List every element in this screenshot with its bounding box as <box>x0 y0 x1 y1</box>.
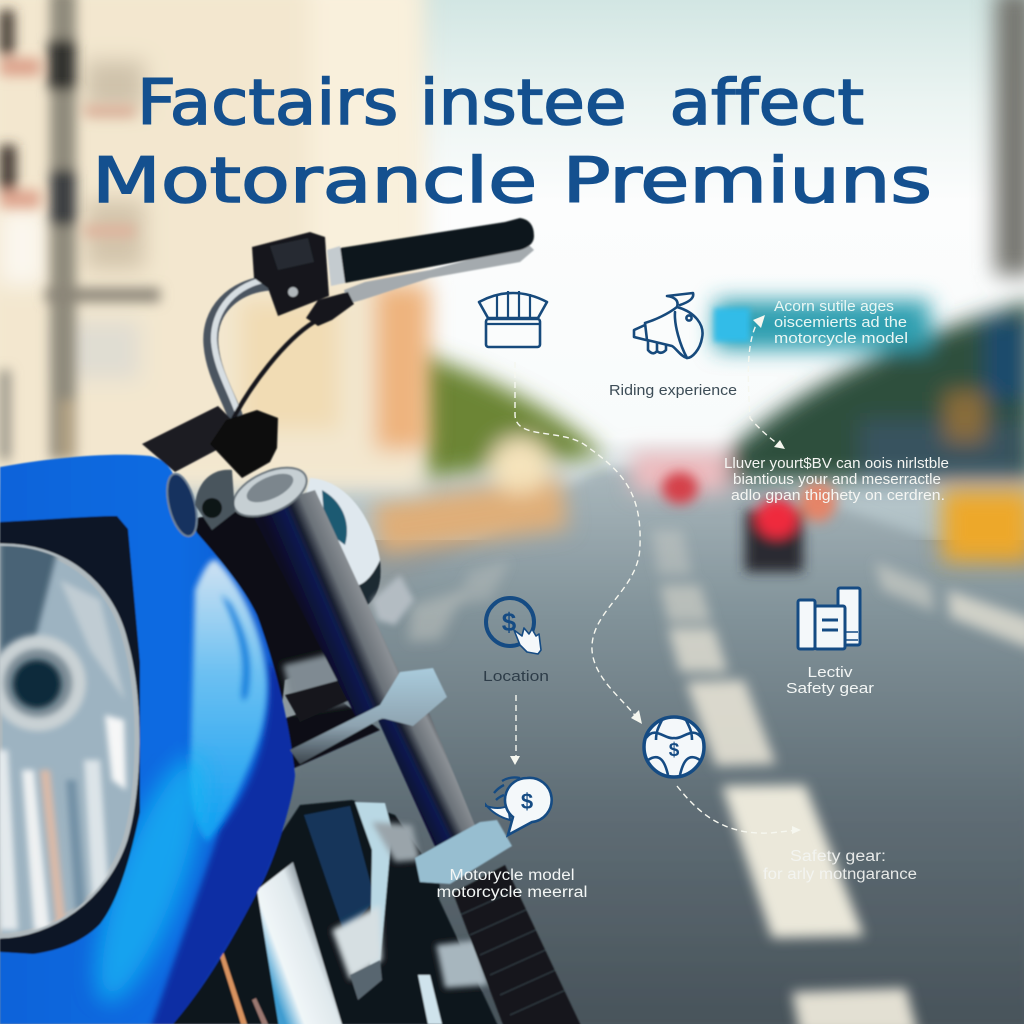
switch housing <box>252 232 329 316</box>
brake lever <box>344 244 534 304</box>
text block: motorcycle model <box>436 867 588 901</box>
text block: upper right: motorcycle model <box>774 330 908 347</box>
icon: coin with pointing hand <box>486 598 541 654</box>
icon: globe with dollar <box>644 717 704 777</box>
fairing mount bolt <box>162 471 202 539</box>
dashed connector arrows <box>515 318 798 833</box>
grip collar <box>327 246 345 286</box>
background: blurred trees and right side scenery <box>372 0 1024 562</box>
dark mechanical area behind fairing <box>170 500 500 1024</box>
text block: safety gear note: Safety gear: <box>790 848 886 865</box>
front fork upper tube <box>250 490 405 725</box>
icon: coin with pointing hand: $ <box>502 607 517 637</box>
background: blurred vehicles ahead <box>662 472 836 572</box>
chrome handlebar <box>211 279 270 415</box>
text block: middle right <box>724 455 949 504</box>
title <box>92 66 932 217</box>
fairing shading <box>74 560 300 1024</box>
background: road lane markings <box>408 530 1024 1024</box>
lower black clamp <box>142 406 278 478</box>
text block: lectiv safety gear <box>786 664 874 697</box>
text block: lectiv safety gear: Safety gear <box>786 680 874 697</box>
background: buildings on the left <box>0 0 430 490</box>
black cable <box>230 322 314 425</box>
front fairing <box>0 455 300 1024</box>
lever pivot <box>306 292 354 326</box>
text block: motorcycle model: motorcycle meerral <box>436 884 588 901</box>
arrow: right text loop <box>748 318 782 447</box>
grip <box>340 218 534 283</box>
background: blue sign square <box>714 308 750 342</box>
chrome headlamp housing <box>300 478 414 625</box>
arrowheads <box>510 315 801 834</box>
fork lower bracket <box>415 820 512 884</box>
switch button <box>270 238 314 270</box>
text block: safety gear note <box>763 848 917 883</box>
icon: globe with dollar: $ <box>669 740 680 761</box>
text block: lectiv safety gear: Lectiv <box>808 664 853 681</box>
icon: speech bubble dollar <box>486 777 552 835</box>
fork lower tube <box>378 710 478 862</box>
icon: premium box <box>479 291 547 347</box>
icon: book and document <box>798 588 860 649</box>
fork top cap <box>195 458 314 530</box>
label: riding experience: Riding experience <box>609 383 737 399</box>
background: building columns and windows <box>0 0 160 460</box>
background: ground fill <box>0 540 1024 1024</box>
title line 2: Motorancle Premiuns <box>92 144 932 217</box>
arrow: first icon winding to globe icon <box>515 362 640 722</box>
icon: speech bubble dollar: $ <box>521 789 533 814</box>
rubber fork boot <box>453 865 583 1024</box>
icon: megaphone <box>634 293 703 358</box>
triple clamp <box>290 668 447 764</box>
background: road surface <box>270 470 1024 1024</box>
text block: upper right: Acorn sutile ages <box>774 298 894 315</box>
text block: safety gear note: for arly motngarance <box>763 866 917 883</box>
switch screw <box>288 287 298 297</box>
text block: upper right: oiscemierts ad the <box>774 314 907 331</box>
headlight lens <box>0 540 137 936</box>
chrome lower tube <box>257 862 345 1024</box>
text block: middle right: adlo gpan thighety on cerdren. <box>731 487 945 504</box>
label: location: Location <box>483 668 549 685</box>
text block: upper right <box>774 298 908 347</box>
text block: motorcycle model: Motorycle model <box>450 867 574 884</box>
arrow: globe to safety gear <box>677 786 798 833</box>
arrow: location down <box>515 695 517 760</box>
text block: middle right: biantious your and meserractle <box>733 471 941 488</box>
background: sky <box>0 0 1024 560</box>
headlight dark surround <box>0 516 140 954</box>
title line 1: Factairs instee affect <box>137 66 864 139</box>
text block: middle right: Lluver yourt$BV can oois nirlstble <box>724 455 949 472</box>
motorcycle <box>0 218 583 1024</box>
